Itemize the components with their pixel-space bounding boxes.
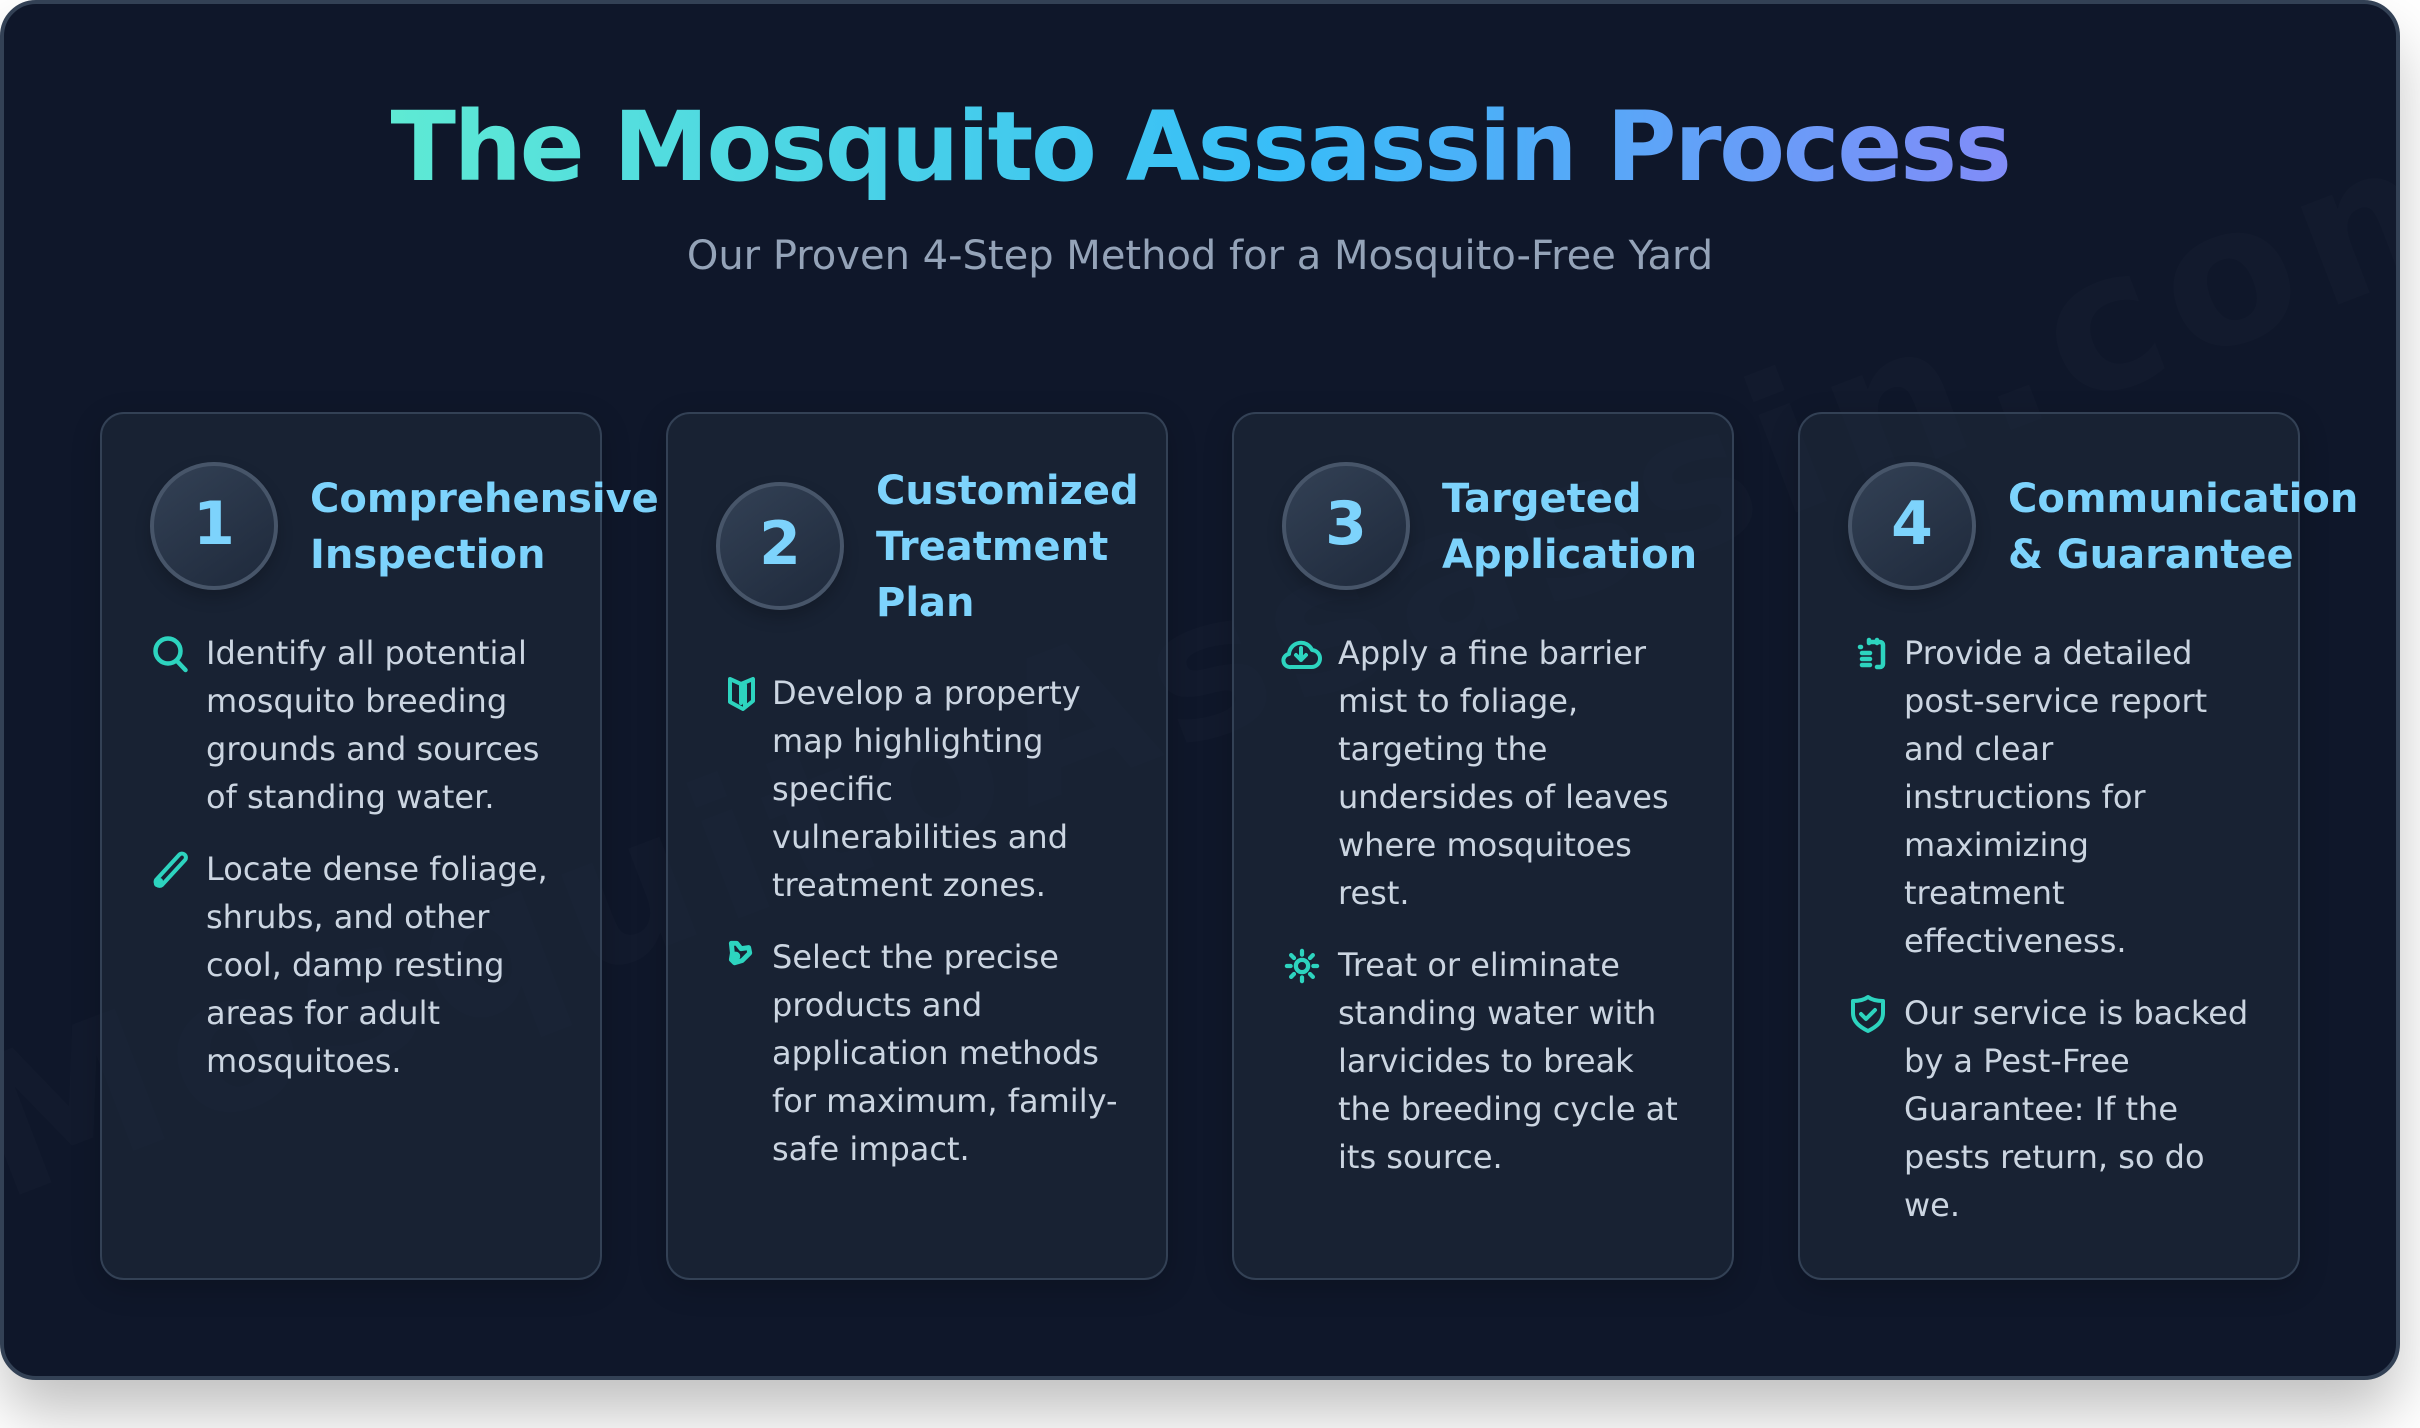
heading: step 1: Comprehensive — [310, 476, 659, 522]
icon: map — [728, 676, 755, 711]
text: step 4 item 1: effectiveness. — [1904, 922, 2127, 960]
icon: cloud download — [1281, 640, 1322, 670]
text: step 3 item 1: targeting the — [1338, 730, 1547, 768]
text: step 3 item 1: rest. — [1338, 874, 1410, 912]
step number 3 — [1282, 462, 1410, 590]
text: step 4 item 1 — [1904, 634, 2207, 960]
text: step 1 item 1: of standing water. — [206, 778, 494, 816]
text: step 4 item 2: pests return, so do — [1904, 1138, 2205, 1176]
icon: report clipboard — [1858, 638, 1886, 670]
text: step 2 item 2: application methods — [772, 1034, 1099, 1072]
text: step 4 item 1: maximizing — [1904, 826, 2089, 864]
text: step 1 item 2: areas for adult — [206, 994, 440, 1032]
icon: spray bottle — [728, 940, 752, 966]
icon: magnifier — [153, 636, 188, 672]
text: step 1 item 1: grounds and sources — [206, 730, 539, 768]
heading: step 3 — [1442, 476, 1697, 578]
text: step 4 item 1: and clear — [1904, 730, 2053, 768]
text: step 2 item 2: for maximum, family- — [772, 1082, 1118, 1120]
text: step 2 item 1: Develop a property — [772, 674, 1081, 712]
icon: sun — [1284, 948, 1320, 984]
step number 4 — [1848, 462, 1976, 590]
panel: step 1 — [100, 412, 602, 1280]
text: step 2 item 2 — [772, 938, 1118, 1168]
text: step 4 item 1: treatment — [1904, 874, 2065, 912]
step number 1 — [150, 462, 278, 590]
text: step 3 item 1: mist to foliage, — [1338, 682, 1578, 720]
step number 3: 3 — [1325, 489, 1367, 559]
text: step 3 item 2 — [1338, 946, 1678, 1176]
text: step 3 item 2: the breeding cycle at — [1338, 1090, 1678, 1128]
text: step 1 item 1 — [206, 634, 539, 816]
text: step 1 item 1: mosquito breeding — [206, 682, 507, 720]
heading: step 2: Customized — [876, 468, 1139, 514]
text: step 3 item 2: its source. — [1338, 1138, 1503, 1176]
text: step 3 item 1 — [1338, 634, 1669, 912]
heading: step 1: Inspection — [310, 532, 545, 578]
step number 1: 1 — [193, 489, 235, 559]
text: step 3 item 1: Apply a fine barrier — [1338, 634, 1646, 672]
text: step 2 item 1 — [772, 674, 1081, 904]
heading: step 4: & Guarantee — [2008, 532, 2294, 578]
text: step 2 item 1: vulnerabilities and — [772, 818, 1068, 856]
text: step 4 item 2: Our service is backed — [1904, 994, 2248, 1032]
heading: step 1 — [310, 476, 659, 578]
text: step 4 item 2: we. — [1904, 1186, 1960, 1224]
text: step 1 item 2: Locate dense foliage, — [206, 850, 548, 888]
heading: step 3: Application — [1442, 532, 1697, 578]
text: step 1 item 2: shrubs, and other — [206, 898, 489, 936]
heading: step 2 — [876, 468, 1139, 626]
text: step 1 item 2: mosquitoes. — [206, 1042, 402, 1080]
text: step 4 item 2: by a Pest-Free — [1904, 1042, 2130, 1080]
text: step 3 item 2: standing water with — [1338, 994, 1656, 1032]
text: step 3 item 2: Treat or eliminate — [1338, 946, 1620, 984]
text: step 2 item 2: safe impact. — [772, 1130, 970, 1168]
step number 4: 4 — [1891, 489, 1933, 559]
text: step 1 item 2 — [206, 850, 548, 1080]
heading: step 2: Treatment — [876, 524, 1108, 570]
step number 2: 2 — [759, 509, 801, 579]
subtitle: Our Proven 4-Step Method for a Mosquito-Free Yard — [687, 233, 1713, 279]
panel: step 3 — [1232, 412, 1734, 1280]
text: step 2 item 1: map highlighting — [772, 722, 1043, 760]
heading: step 2: Plan — [876, 580, 974, 626]
text: step 3 item 1: undersides of leaves — [1338, 778, 1669, 816]
text: step 4 item 2: Guarantee: If the — [1904, 1090, 2178, 1128]
text: step 1 item 1: Identify all potential — [206, 634, 527, 672]
icon: pencil — [154, 852, 188, 888]
text: step 2 item 1: treatment zones. — [772, 866, 1046, 904]
text: step 3 item 2: larvicides to break — [1338, 1042, 1634, 1080]
text: step 1 item 2: cool, damp resting — [206, 946, 504, 984]
title: The Mosquito Assassin Process — [391, 91, 2009, 203]
heading: step 3: Targeted — [1442, 476, 1642, 522]
text: step 2 item 2: products and — [772, 986, 982, 1024]
heading: step 4: Communication — [2008, 476, 2358, 522]
text: step 2 item 1: specific — [772, 770, 893, 808]
panel: step 4 — [1798, 412, 2300, 1280]
step number 2 — [716, 482, 844, 610]
panel: step 2 — [666, 412, 1168, 1280]
text: step 3 item 1: where mosquitoes — [1338, 826, 1632, 864]
heading: step 4 — [2008, 476, 2358, 578]
text: step 4 item 1: Provide a detailed — [1904, 634, 2192, 672]
text: step 4 item 1: instructions for — [1904, 778, 2146, 816]
text: step 2 item 2: Select the precise — [772, 938, 1059, 976]
icon: shield check — [1851, 995, 1885, 1033]
text: step 4 item 1: post-service report — [1904, 682, 2207, 720]
text: step 4 item 2 — [1904, 994, 2248, 1224]
